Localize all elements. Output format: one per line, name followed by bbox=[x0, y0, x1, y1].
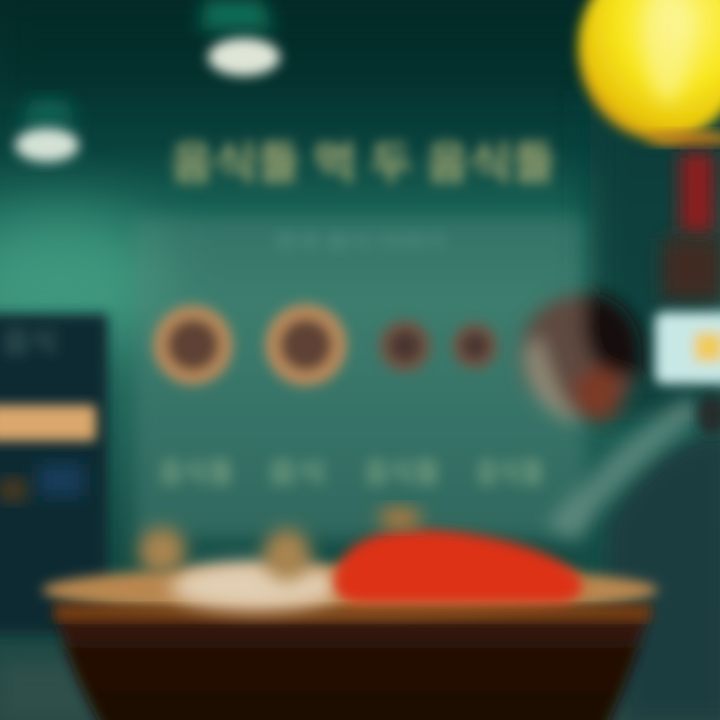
icon: person head bbox=[520, 292, 641, 425]
sign text top: 음식 bbox=[2, 326, 58, 359]
bowl rim bbox=[42, 565, 658, 615]
labels under circles bbox=[158, 457, 544, 488]
dumpling middle bbox=[263, 529, 311, 581]
lantern tassel bbox=[680, 152, 714, 234]
white rice bbox=[170, 562, 340, 610]
labels under circles: 음식 bbox=[268, 457, 326, 488]
icon: ceiling lamp left bbox=[15, 100, 79, 162]
panel: left dark sign bbox=[0, 314, 108, 634]
panel: glowing screen bbox=[655, 312, 720, 384]
labels under circles: 음식들 bbox=[158, 457, 234, 488]
title: 음식들 먹 두 음식들 bbox=[170, 139, 556, 188]
icon: circle three bbox=[379, 320, 431, 372]
subtitle: 한국 음식 이야기 bbox=[275, 232, 445, 252]
dumpling left bbox=[138, 527, 186, 575]
icon: circle two bbox=[265, 304, 347, 386]
icon: ceiling lamp top bbox=[200, 0, 280, 76]
sign amber block bbox=[0, 480, 26, 500]
icon: circle one bbox=[153, 305, 233, 385]
person body bbox=[545, 395, 720, 720]
arm bbox=[545, 395, 700, 540]
labels under circles: 음식들 bbox=[476, 457, 544, 488]
bowl on table bbox=[42, 508, 658, 720]
red kimchi bbox=[334, 530, 582, 603]
circle row bbox=[153, 304, 498, 386]
labels under circles: 음식들 bbox=[364, 457, 440, 488]
sign orange bar bbox=[0, 405, 96, 441]
icon: yellow lantern bbox=[578, 0, 720, 300]
panel: central board bbox=[135, 218, 585, 538]
sign blue block bbox=[38, 464, 84, 496]
icon: circle four bbox=[452, 323, 498, 369]
